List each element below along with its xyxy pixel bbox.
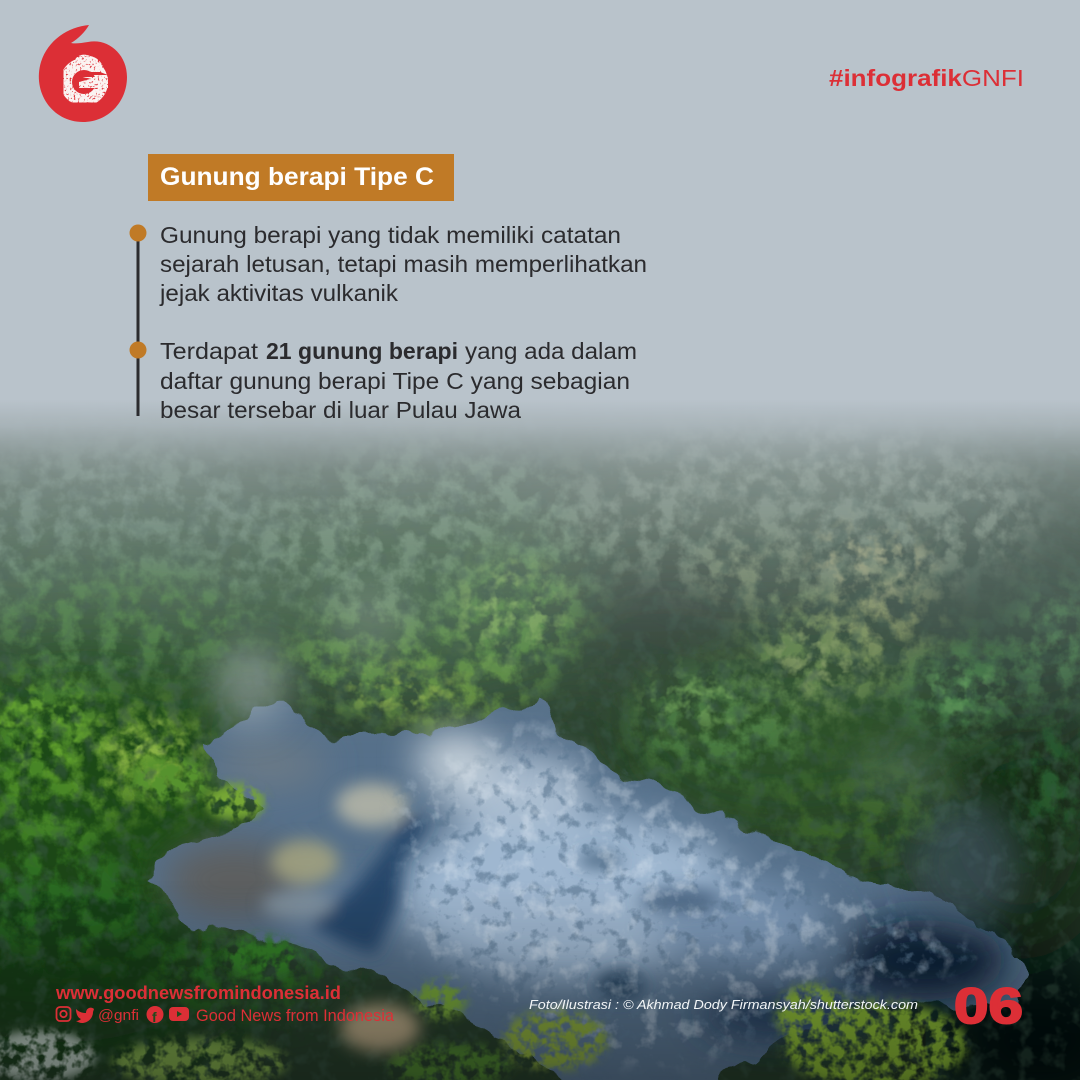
icon: facebook: f [152, 1009, 157, 1025]
steam plumes [212, 580, 1020, 930]
heading: Gunung berapi Tipe C: Gunung berapi Tipe C [160, 163, 434, 191]
forest canopy: lit crowns [0, 430, 1080, 1010]
icon: facebook [146, 1006, 164, 1025]
icon: youtube [169, 1007, 189, 1021]
text block: definition [159, 222, 647, 306]
forest canopy: shadow gaps [0, 400, 1080, 1080]
forest canopy: highlights [0, 525, 1000, 785]
text block: count of type C volcanoes: besar tersebar di luar Pulau Jawa [160, 397, 521, 423]
page name: Good News from Indonesia [196, 1006, 395, 1025]
text block: count of type C volcanoes [160, 338, 637, 423]
social handle: @gnfi [98, 1007, 139, 1024]
text block: count of type C volcanoes: daftar gunung berapi Tipe C yang sebagian [160, 368, 630, 394]
footer: website and social [55, 983, 395, 1025]
bottom shading [0, 902, 1080, 1080]
crater lake [150, 698, 1020, 1080]
icon: twitter [76, 1008, 94, 1023]
sandy bank [340, 1004, 420, 1052]
foreground trees [0, 756, 967, 1080]
heading: Gunung berapi Tipe C [148, 154, 454, 201]
lake cracked texture [400, 720, 990, 1060]
lake surface tones [165, 720, 1005, 1060]
text block: count of type C volcanoes: yang ada dalam [465, 338, 637, 364]
text block: count of type C volcanoes: 21 gunung berapi [266, 338, 458, 364]
text block: definition: Gunung berapi yang tidak memiliki catatan [160, 222, 621, 248]
timeline markers [130, 224, 146, 416]
footer: website and social: www.goodnewsfromindonesia.id [55, 983, 341, 1003]
photo: aerial forest and crater lake [0, 400, 1080, 1080]
logo: white garuda G mark [66, 55, 108, 100]
text block: definition: sejarah letusan, tetapi masih memperlihatkan [160, 251, 647, 277]
hashtag: #infografikGNFI: #infografik GNFI [829, 65, 1024, 91]
page number: 06 [954, 978, 1023, 1034]
text block: count of type C volcanoes: Terdapat [160, 338, 259, 364]
forest base [0, 400, 1080, 1080]
logo: GNFI [39, 25, 127, 122]
fog gradient over forest [0, 400, 1080, 696]
text block: definition: jejak aktivitas vulkanik [159, 280, 399, 306]
photo credit: Foto/Ilustrasi : © Akhmad Dody Firmansyah/shutterstock.com [529, 997, 918, 1012]
icon: instagram [56, 1007, 70, 1021]
